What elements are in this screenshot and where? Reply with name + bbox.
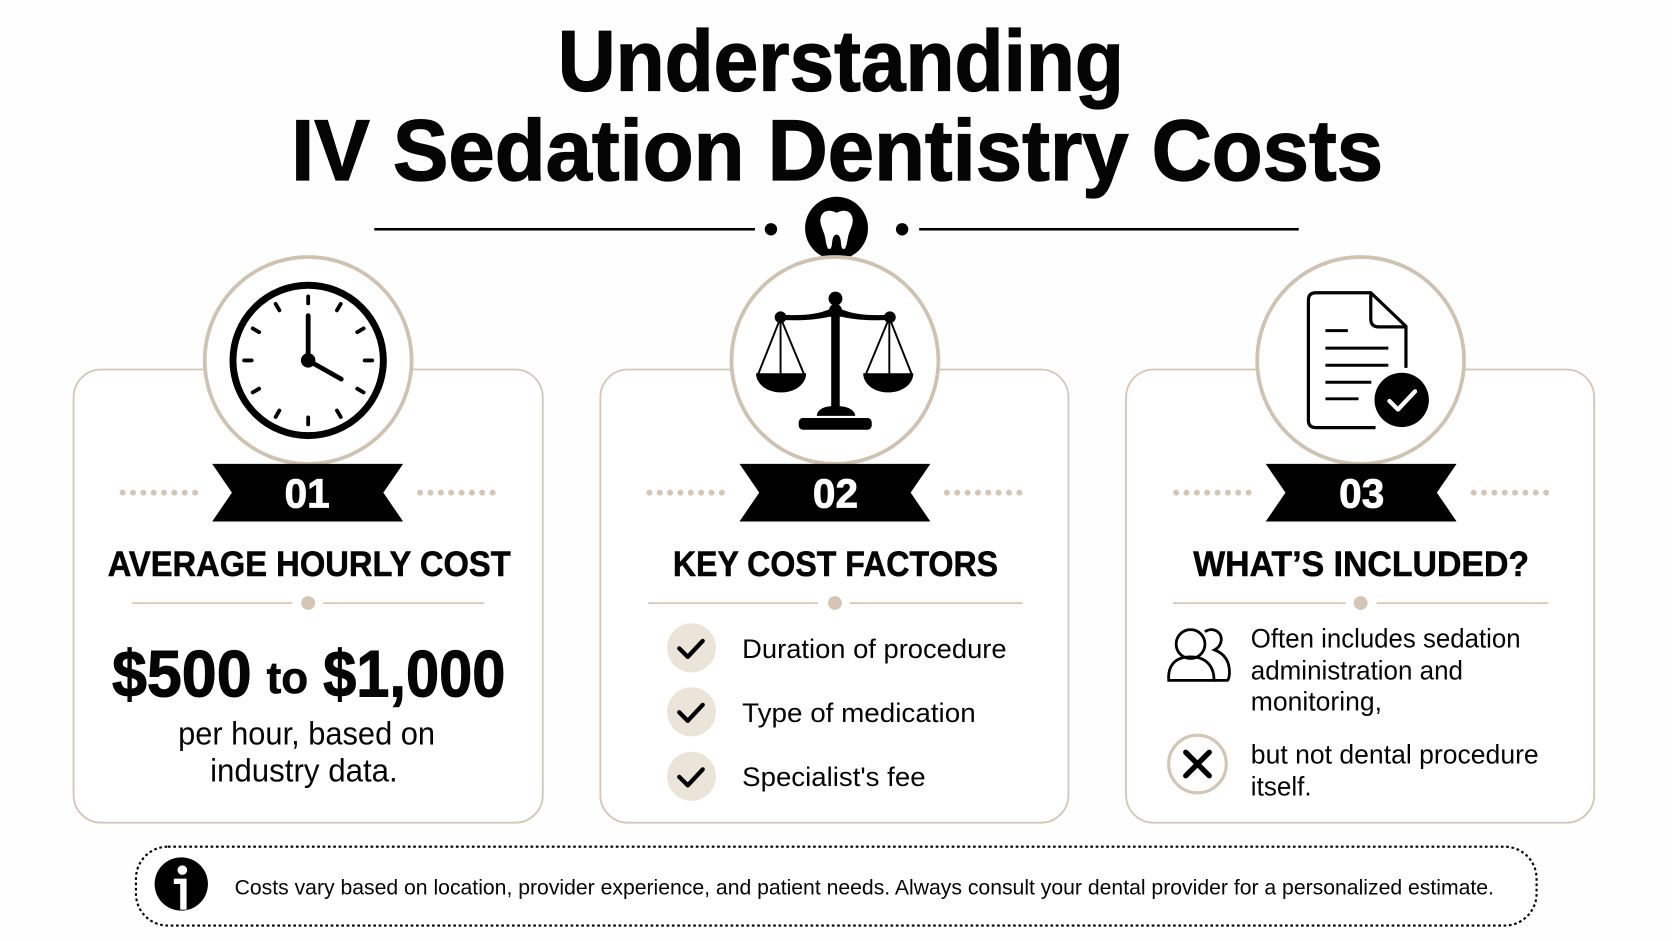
icon: people — [1169, 630, 1229, 680]
panel: average hourly cost — [74, 257, 543, 823]
factor: duration: Duration of procedure — [742, 633, 1007, 664]
heading: KEY COST FACTORS — [673, 545, 998, 584]
heading: AVERAGE HOURLY COST — [108, 545, 511, 584]
included text: Often includes sedation — [1251, 622, 1521, 653]
price range — [112, 637, 505, 711]
callout: disclaimer — [136, 847, 1537, 926]
factor: specialist fee: Specialist's fee — [742, 761, 926, 792]
number ribbon 01: 01 — [285, 471, 330, 517]
heading: WHAT’S INCLUDED? — [1193, 545, 1529, 584]
number ribbon 01 — [212, 464, 403, 521]
dotted accents — [646, 490, 1022, 496]
excluded text: but not dental procedure — [1251, 738, 1539, 769]
price range: $1,000 — [323, 637, 505, 711]
included text — [1251, 622, 1521, 717]
heading rule — [132, 596, 484, 610]
factor: medication: Type of medication — [742, 697, 976, 728]
title — [291, 14, 1383, 199]
factor: medication — [667, 687, 976, 736]
icon: clock — [205, 257, 412, 464]
number ribbon 02: 02 — [813, 471, 858, 517]
card outline — [74, 369, 543, 823]
excluded text: itself. — [1251, 770, 1312, 801]
icon: balance scale — [732, 257, 938, 464]
factor: specialist fee — [667, 752, 926, 801]
price range: $500 — [112, 637, 252, 711]
title: Understanding — [558, 14, 1124, 110]
title: IV Sedation Dentistry Costs — [291, 103, 1383, 199]
dotted accents — [120, 490, 496, 496]
included text: administration and — [1251, 654, 1463, 685]
disclaimer text: Costs vary based on location, provider experience, and patient needs. Always consult your dental provider for a personalized estimate. — [235, 877, 1494, 900]
number ribbon 03: 03 — [1339, 471, 1384, 517]
title divider with tooth icon — [374, 197, 1299, 260]
card outline — [1126, 369, 1594, 823]
heading rule — [1173, 596, 1548, 610]
number ribbon 03 — [1266, 464, 1457, 521]
number ribbon 02 — [739, 464, 930, 521]
price note: per hour, based on — [178, 715, 435, 751]
heading rule — [648, 596, 1023, 610]
excluded text — [1251, 738, 1539, 801]
panel: key cost factors — [600, 257, 1068, 823]
icon: info — [155, 857, 208, 911]
icon: cross — [1169, 735, 1226, 793]
price note: industry data. — [210, 753, 398, 789]
included text: monitoring, — [1251, 686, 1382, 717]
price note — [178, 715, 435, 789]
icon: document with check — [1257, 257, 1464, 464]
price range: to — [267, 653, 308, 703]
dotted accents — [1173, 490, 1549, 496]
factor: duration — [667, 623, 1007, 672]
panel: what's included — [1126, 257, 1594, 823]
card outline — [600, 369, 1068, 823]
